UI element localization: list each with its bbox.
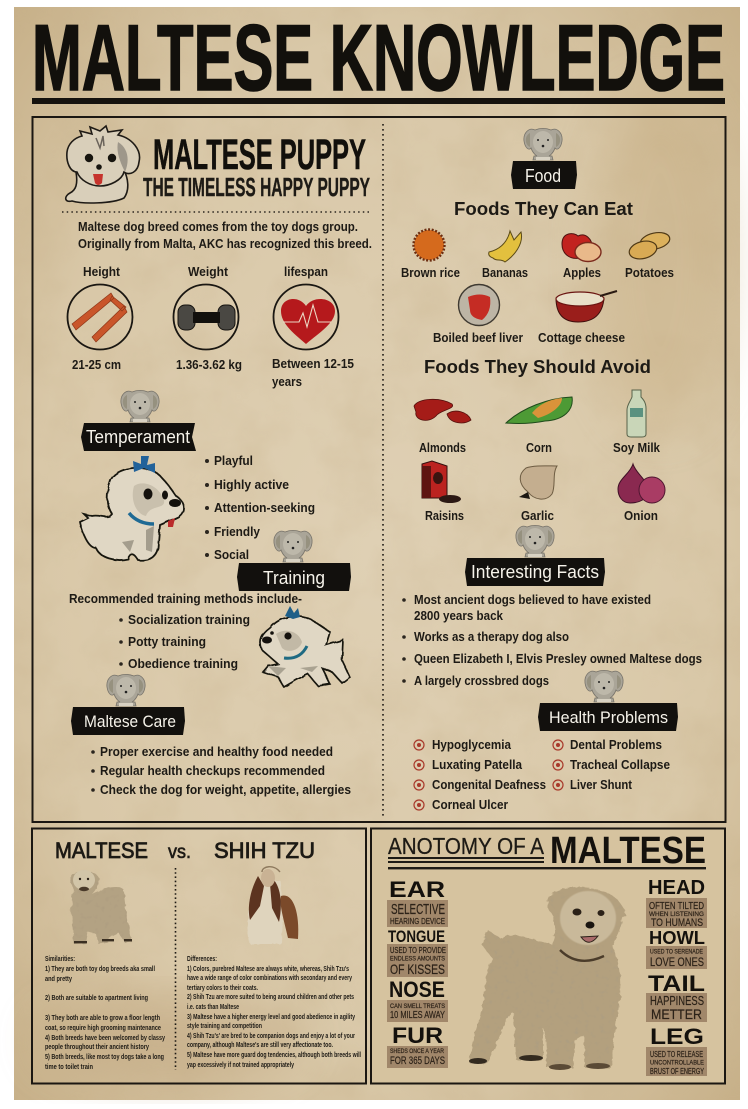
intro text: Originally from Malta, AKC has recognized this breed.: [78, 237, 372, 251]
intro text: Maltese dog breed comes from the toy dogs group.: [78, 220, 358, 234]
label: fur: SHEDS ONCE A YEAR: [390, 1049, 445, 1055]
panel: maltese care: [71, 674, 351, 797]
photo: maltese: [70, 870, 132, 944]
intro text: [78, 220, 372, 251]
label: fur: FUR: [392, 1023, 443, 1048]
illustration: running dog: [260, 606, 350, 687]
food: garlic: [519, 466, 557, 523]
label: tongue: [387, 927, 448, 977]
list: temperament traits: Highly active: [214, 478, 289, 492]
label: head: TO HUMANS: [651, 917, 703, 929]
list: health problems right: Dental Problems: [570, 738, 662, 752]
list: temperament traits: Social: [214, 548, 249, 562]
label: tail: METTER: [651, 1006, 702, 1022]
list: facts: Queen Elizabeth I, Elvis Presley owned Maltese dogs: [414, 652, 702, 666]
text: similarities: [45, 956, 165, 1071]
icon: small dog head: [524, 128, 562, 160]
label: leg: [646, 1024, 707, 1076]
food: corn: [506, 397, 572, 455]
panel: training: [69, 530, 351, 687]
label: nose: CAN SMELL TREATS: [390, 1003, 446, 1010]
list: facts: A largely crossbred dogs: [414, 674, 549, 688]
text: similarities: 2) Both are suitable to apartment living: [45, 995, 148, 1002]
text: differences: 5) Maltese have more guard dog tendencies, although both breeds will: [187, 1052, 361, 1059]
list: health problems left: Luxating Patella: [432, 758, 523, 772]
panel: maltese vs shih tzu: [32, 828, 366, 1084]
list: health problems left: [414, 738, 546, 812]
list: temperament traits: Playful: [214, 454, 253, 468]
text: similarities: time to toilet train: [45, 1064, 93, 1071]
list: health problems left: Hypoglycemia: [432, 738, 512, 752]
food: onion: Onion: [624, 509, 658, 523]
label: leg: BRUST OF ENERGY: [650, 1067, 704, 1076]
label: nose: [387, 977, 448, 1022]
text: differences: i.e. cats than Maltese: [187, 1004, 239, 1011]
panel: temperament: [80, 390, 315, 562]
label: nose: 10 MILES AWAY: [390, 1010, 445, 1021]
label: tongue: OF KISSES: [390, 961, 445, 977]
heading: Maltese vs. Shih Tzu: [55, 838, 315, 863]
heading: Anotomy of a Maltese: ANOTOMY OF A: [388, 833, 545, 859]
text: similarities: coat, so require high grooming maintenance: [45, 1025, 161, 1032]
food: apples: Apples: [563, 266, 601, 280]
banner: Food: [511, 161, 577, 189]
food: almonds: [414, 399, 471, 455]
text: similarities: 4) Both breeds have been welcomed by classy: [45, 1035, 165, 1042]
stat: lifespan: lifespan: [284, 265, 328, 279]
stat: lifespan: Between 12-15: [272, 357, 354, 371]
icon: small dog head: [107, 674, 145, 706]
banner: Training: [237, 563, 351, 591]
text: similarities: people throughout their ancient history: [45, 1044, 149, 1051]
list: facts: 2800 years back: [414, 609, 503, 623]
label: head: HEAD: [648, 877, 705, 899]
food: cottage cheese: [538, 291, 625, 345]
label: nose: NOSE: [389, 977, 445, 1002]
food: bananas: [482, 231, 528, 280]
label: leg: USED TO RELEASE: [650, 1050, 703, 1059]
list: training methods: Socialization training: [128, 613, 250, 627]
icon: small dog head: [121, 390, 159, 422]
food: boiled beef liver: Boiled beef liver: [433, 331, 523, 345]
text: similarities: and pretty: [45, 976, 72, 983]
food: boiled beef liver: [433, 284, 523, 345]
panel: health problems: [414, 670, 678, 812]
food: potatoes: [625, 230, 674, 280]
food: bananas: Bananas: [482, 266, 528, 280]
photo: shih tzu: [247, 867, 298, 944]
list: training methods: Potty training: [128, 635, 206, 649]
heading: Maltese vs. Shih Tzu: SHIH TZU: [214, 838, 315, 863]
heading: Maltese Puppy: MALTESE PUPPY: [153, 131, 366, 179]
list: temperament traits: Friendly: [214, 525, 260, 539]
text: differences: 1) Colors, purebred Maltese are always white, whereas, Shih Tzu's: [187, 966, 349, 973]
text: differences: 4) Shih Tzu's' are bred to be companion dogs and enjoy a lot of your: [187, 1033, 355, 1040]
label: leg: UNCONTROLLABLE: [650, 1060, 705, 1066]
label: ear: EAR: [389, 877, 445, 902]
food: potatoes: Potatoes: [625, 266, 674, 280]
text: similarities: 5) Both breeds, like most toy dogs take a long: [45, 1054, 164, 1061]
banner: Food: Food: [525, 166, 561, 186]
food: brown rice: Brown rice: [401, 266, 460, 280]
list: health problems right: Tracheal Collapse: [570, 758, 670, 772]
label: head: OFTEN TILTED: [649, 900, 704, 912]
illustration: white dog with bow: [80, 456, 184, 560]
panel: interesting facts: [402, 526, 702, 688]
label: head: WHEN LISTENING: [649, 911, 704, 918]
text: differences: company, although Maltese's are still very affectionate too.: [187, 1042, 333, 1049]
heading: Foods They Can Eat: Foods They Can Eat: [454, 199, 633, 219]
text: differences: 3) Maltese have a higher energy level and good abedience in agility: [187, 1014, 355, 1021]
food: raisins: Raisins: [425, 509, 464, 523]
heading: Maltese vs. Shih Tzu: vs.: [168, 842, 191, 863]
stat: height: [68, 265, 132, 372]
list: facts: Most ancient dogs believed to have existed: [414, 593, 651, 607]
photo: maltese dog: [469, 887, 625, 1070]
banner: Interesting Facts: [465, 558, 605, 586]
label: tongue: USED TO PROVIDE: [390, 946, 446, 955]
banner: Maltese Care: Maltese Care: [84, 712, 176, 731]
label: head: [646, 877, 707, 929]
food: raisins: [422, 461, 464, 523]
list: facts: Works as a therapy dog also: [414, 630, 569, 644]
text: similarities: 3) They both are able to grow a floor length: [45, 1015, 160, 1022]
stat: height: 21-25 cm: [72, 358, 121, 372]
icon: puppy face: [66, 126, 140, 203]
label: fur: [387, 1023, 448, 1068]
list: care tips: Check the dog for weight, appetite, allergies: [100, 783, 351, 797]
heading: Maltese vs. Shih Tzu: MALTESE: [55, 838, 148, 863]
icon: small dog head: [274, 530, 312, 562]
food: almonds: Almonds: [419, 441, 466, 455]
list: facts: [402, 593, 702, 688]
food: apples: [562, 234, 601, 280]
stat: lifespan: years: [272, 375, 302, 389]
text: differences: Differences:: [187, 956, 217, 963]
panel: main: [32, 117, 726, 822]
icon: small dog head: [516, 526, 554, 557]
label: ear: [387, 877, 448, 927]
banner: Temperament: Temperament: [86, 427, 190, 447]
text: similarities: Similarities:: [45, 956, 75, 963]
label: ear: HEARING DEVICE: [390, 917, 445, 926]
food: onion: [618, 464, 665, 523]
label: howl: [646, 928, 707, 969]
label: tail: TAIL: [648, 971, 705, 996]
label: tongue: ENDLESS AMOUNTS: [390, 956, 446, 962]
text: differences: 2) Shih Tzu are more suited to being around children and other pets: [187, 994, 354, 1001]
banner: Maltese Care: [71, 707, 185, 735]
banner: Health Problems: Health Problems: [549, 708, 668, 727]
food: corn: Corn: [526, 441, 552, 455]
banner: Training: Training: [263, 568, 325, 588]
text: similarities: 1) They are both toy dog breeds aka small: [45, 966, 155, 973]
stat: lifespan: [272, 265, 354, 389]
label: leg: LEG: [650, 1024, 704, 1049]
food: soy milk: Soy Milk: [613, 441, 660, 455]
panel: anatomy of a maltese: [371, 828, 725, 1084]
list: temperament traits: Attention-seeking: [214, 501, 315, 515]
text: differences: yap excessively if not trained appropriately: [187, 1062, 294, 1069]
label: howl: USED TO SERENADE: [650, 948, 704, 956]
list: training methods: Obedience training: [128, 657, 238, 671]
stat: height: Height: [83, 265, 121, 279]
text: differences: [187, 956, 361, 1069]
heading: Anotomy of a Maltese: MALTESE: [550, 830, 706, 872]
text: differences: have a wide range of color combinations with secondary and every: [187, 975, 352, 982]
food: garlic: Garlic: [521, 509, 554, 523]
list: temperament traits: [205, 454, 315, 562]
stat: weight: 1.36-3.62 kg: [176, 358, 242, 372]
list: health problems right: Liver Shunt: [570, 778, 633, 792]
list: training methods: [119, 613, 250, 671]
list: health problems left: Congenital Deafness: [432, 778, 546, 792]
list: care tips: Proper exercise and healthy food needed: [100, 745, 333, 759]
text: training intro: Recommended training methods include-: [69, 592, 302, 606]
icon: small dog head: [585, 670, 623, 702]
label: fur: FOR 365 DAYS: [390, 1055, 445, 1067]
heading: Foods They Should Avoid: Foods They Should Avoid: [424, 356, 651, 377]
label: ear: SELECTIVE: [391, 901, 445, 918]
stat: weight: [174, 265, 242, 372]
label: tail: [646, 971, 707, 1022]
label: howl: HOWL: [649, 928, 705, 948]
list: health problems left: Corneal Ulcer: [432, 798, 508, 812]
list: health problems right: [553, 738, 670, 792]
list: care tips: [91, 745, 351, 797]
text: differences: tertiary colors to their coats.: [187, 985, 258, 992]
panel: food: [401, 128, 674, 523]
label: howl: LOVE ONES: [650, 955, 704, 969]
label: tail: HAPPINESS: [650, 993, 704, 1008]
banner: Interesting Facts: Interesting Facts: [471, 562, 599, 582]
panel: maltese puppy intro: [62, 126, 372, 389]
stat: weight: Weight: [188, 265, 229, 279]
text: differences: style training and competition: [187, 1023, 262, 1030]
banner: Health Problems: [538, 703, 678, 731]
banner: Temperament: [81, 423, 196, 451]
list: care tips: Regular health checkups recommended: [100, 764, 325, 778]
food: cottage cheese: Cottage cheese: [538, 331, 625, 345]
food: soy milk: [613, 390, 660, 455]
heading: Anotomy of a Maltese: [388, 830, 706, 872]
label: tongue: TONGUE: [388, 927, 445, 946]
heading: The Timeless Happy Puppy: THE TIMELESS HAPPY PUPPY: [143, 172, 370, 202]
food: brown rice: [401, 230, 460, 280]
